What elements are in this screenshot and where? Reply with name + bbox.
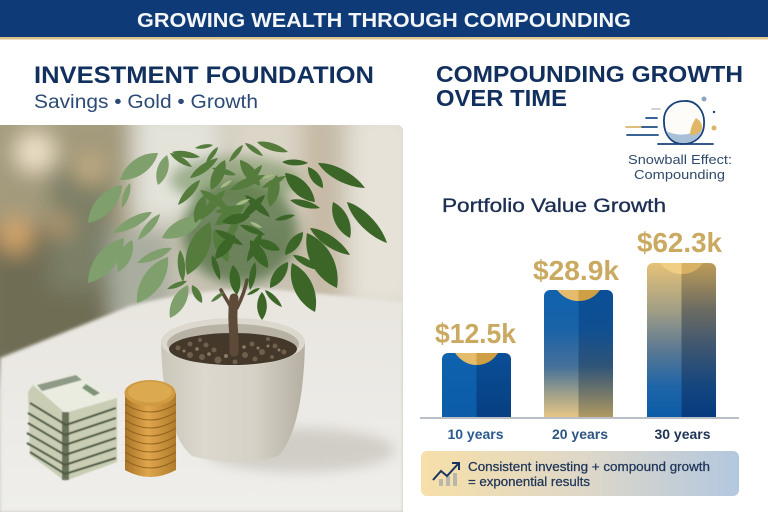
title banner: GROWING WEALTH THROUGH COMPOUNDING [137,9,631,32]
title banner [0,0,768,40]
plant leaves [80,139,392,321]
light highlight leaves [219,174,274,229]
bar: 30 years: 30 years [654,426,711,442]
dark green leaves [209,158,392,320]
icon: rising chart [433,463,459,486]
pot shadow [205,428,395,472]
icon caption: snowball effect: Compounding [634,167,725,182]
icon: stack of cash [27,373,117,481]
icon: stack of gold coins [124,380,176,477]
bar: 20 years [533,255,619,442]
bar: 10 years [435,318,516,442]
icon caption: snowball effect [628,152,732,182]
icon: plant pot [161,318,305,462]
bar: 30 years: $62.3k [637,227,722,258]
heading: investment foundation: INVESTMENT FOUNDATION [34,62,374,89]
photo: plant, cash and gold coins [0,110,418,512]
pale left leaves [88,153,202,318]
plant trunk [221,280,247,352]
callout: key takeaway: Consistent investing + compound growth [468,460,710,474]
bar: 30 years [637,227,722,442]
soil [169,333,297,365]
bar chart [420,227,739,442]
bar: 20 years: 20 years [552,426,608,442]
bar: 10 years: $12.5k [435,318,516,349]
table surface [0,288,403,512]
callout: key takeaway: = exponential results [468,475,590,489]
chart title: Portfolio Value Growth [442,195,666,217]
bar: 10 years: 10 years [447,426,504,442]
subheading: savings gold growth: Savings • Gold • Growth [34,91,258,113]
callout: key takeaway [421,451,739,496]
icon: snowball [626,96,716,144]
heading: compounding growth over time: OVER TIME [436,85,567,111]
mid green leaves [166,139,289,305]
heading: compounding growth over time [436,61,743,111]
photo background [0,110,418,512]
plant foliage mass [170,156,300,284]
bar: 20 years: $28.9k [533,255,619,286]
heading: compounding growth over time: COMPOUNDING GROWTH [436,61,743,87]
icon caption: snowball effect: Snowball Effect: [628,152,732,167]
